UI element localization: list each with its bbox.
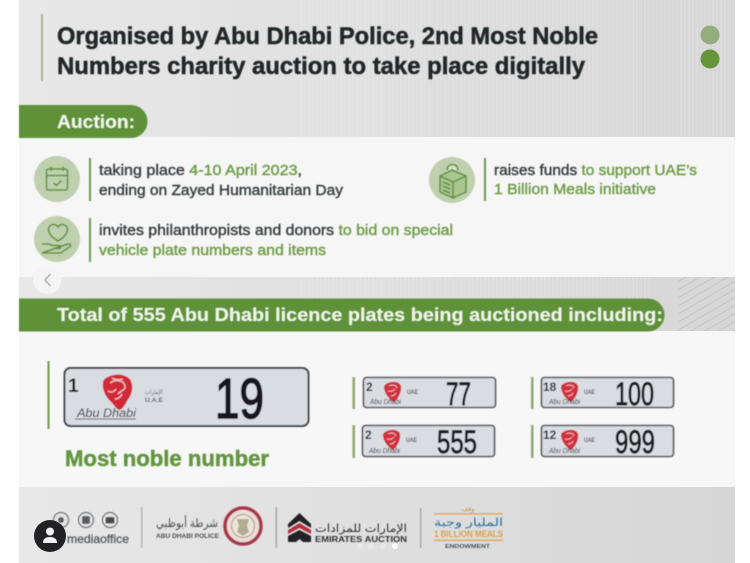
label: most noble number: Most noble number: [65, 446, 269, 471]
plate: 2 77: [352, 376, 496, 412]
decorative green dots: [700, 26, 720, 68]
item: auction dates: ending on Zayed Humanitarian Day: [99, 183, 344, 199]
plate: 12 999: Abu Dhabi: [548, 448, 580, 455]
footer: Abu Dhabi Police logo: ABU DHABI POLICE: [156, 533, 220, 540]
icon: twitter: [54, 512, 68, 528]
heading: Auction: [19, 105, 148, 138]
item: raises funds: [429, 157, 697, 203]
heading: total plates: Total of 555 Abu Dhabi licence plates being auctioned including:: [57, 304, 663, 325]
item: auction dates: [34, 156, 344, 202]
footer: 1 Billion Meals logo: المليار وجبة: [434, 517, 503, 529]
carousel dots: [357, 543, 398, 549]
footer: 1 Billion Meals logo: 1 BILLION MEALS: [434, 529, 503, 540]
plate: 2 77: Abu Dhabi: [369, 399, 401, 406]
title: Organised by Abu Dhabi Police, 2nd Most Noble: [57, 23, 598, 50]
icon: instagram: [78, 512, 94, 528]
main plate: 1 19: الإمارات: [145, 389, 163, 396]
footer: social media: mediaoffice: [67, 532, 129, 546]
item: philanthropists: invites philanthropists and donors to bid on special: [99, 223, 453, 239]
plate: 2 77: 77: [446, 376, 471, 412]
item: raises funds: raises funds to support UAE’s: [494, 163, 697, 179]
icon: donation box: [429, 157, 475, 203]
plate: 2 555: 2: [365, 428, 372, 442]
plate: 2 77: UAE: [407, 390, 418, 396]
footer: Emirates Auction logo: EMIRATES AUCTION: [315, 534, 407, 544]
icon: calendar: [34, 156, 80, 202]
footer: 1 Billion Meals logo: وقف: [462, 506, 474, 513]
plate: 2 555: [352, 424, 494, 460]
plate: 2 77: 2: [366, 380, 373, 394]
plate: 18 100: UAE: [584, 390, 595, 396]
main plate: 1 19: 19: [215, 367, 264, 431]
main plate: 1 19: [48, 361, 308, 431]
footer: 1 Billion Meals logo: ENDOWMENT: [445, 544, 491, 550]
item: raises funds: 1 Billion Meals initiative: [494, 182, 656, 198]
heading: Auction: Auction:: [57, 111, 135, 132]
footer: 1 Billion Meals logo: [420, 506, 503, 550]
title: [41, 14, 598, 81]
footer: Emirates Auction logo: الإمارات للمزادات: [315, 523, 407, 535]
profile avatar: [34, 520, 66, 552]
footer: Abu Dhabi Police logo: [141, 507, 261, 548]
plate: 2 555: Abu Dhabi: [368, 448, 400, 455]
icon: hand holding heart: [34, 216, 80, 262]
plate: 18 100: 100: [615, 376, 654, 412]
carousel back arrow: [33, 266, 61, 294]
item: philanthropists: [34, 216, 453, 262]
plate: 12 999: UAE: [584, 438, 595, 444]
emblem: chevrons: [288, 513, 311, 542]
plate: 12 999: 999: [615, 424, 655, 460]
item: philanthropists: vehicle plate numbers and items: [99, 243, 326, 259]
main plate: 1 19: U.A.E: [145, 398, 163, 404]
emblem: [103, 375, 132, 410]
heading: total plates: [19, 298, 664, 332]
plate: 2 555: UAE: [406, 438, 417, 444]
plate: 18 100: [531, 376, 674, 412]
icon: youtube: [102, 512, 118, 528]
footer: Emirates Auction logo: [276, 507, 407, 548]
footer: Abu Dhabi Police logo: شرطة أبوظبي: [156, 515, 218, 531]
plate: 2 555: 555: [437, 424, 477, 460]
main plate: 1 19: 1: [68, 376, 79, 397]
footer: social media: [54, 512, 129, 546]
main plate: 1 19: Abu Dhabi: [76, 406, 136, 420]
plate: 12 999: 12: [543, 428, 557, 442]
item: auction dates: taking place 4-10 April 2023 ,: [99, 163, 302, 179]
emblem: police crest: [225, 508, 261, 544]
plate: 18 100: Abu Dhabi: [548, 399, 580, 406]
plate: 12 999: [531, 424, 674, 460]
title: Numbers charity auction to take place digitally: [57, 53, 586, 80]
plate: 18 100: 18: [543, 380, 557, 394]
